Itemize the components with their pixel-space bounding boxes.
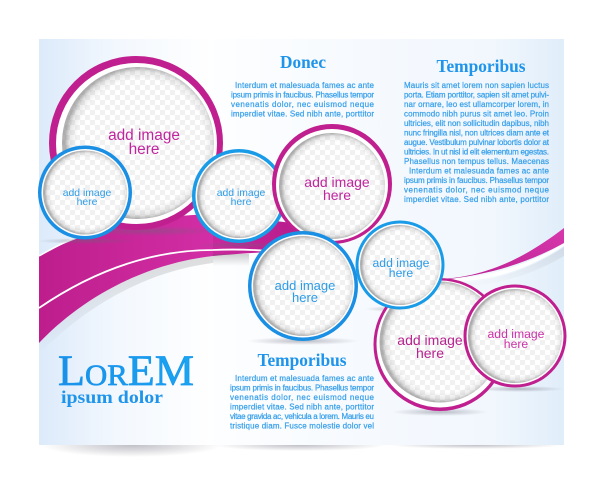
- text block: right column: Mauris sit amet lorem non sapien luctus: [404, 81, 549, 90]
- magenta swoosh band: [39, 214, 310, 354]
- label: add image: here: [77, 197, 98, 208]
- heading: Temporibus right: Temporibus: [436, 56, 526, 76]
- label: add image: here: [292, 290, 318, 305]
- right magenta swoosh: [440, 228, 564, 288]
- image circle: magenta right: [464, 284, 566, 388]
- label: add image: here: [504, 337, 528, 351]
- label: add image: here: [129, 141, 159, 158]
- label: add image: add image: [217, 188, 265, 199]
- text block: lower column: Interdum et malesuada fames ac ante: [235, 374, 375, 383]
- brochure background panels: [39, 39, 564, 445]
- subtitle: ipsum dolor: ipsum dolor: [61, 387, 163, 407]
- text block: lower column: vitae gravida ac, vehicula a lorem. Mauris eu: [230, 412, 374, 421]
- text block: right column: venenatis dolor, nec euismod neque: [404, 186, 550, 194]
- text block: right column: nar ornare, leo est ullamcorper lorem, in: [404, 100, 549, 109]
- text block: right column: augue. Vestibulum pulvinar lobortis dolor at: [404, 138, 550, 147]
- page bottom shadows: [42, 433, 562, 457]
- text block: right column: commodo nibh purus sit amet leo. Proin: [404, 110, 549, 118]
- text block: lower column: venenatis dolor, nec euismod neque: [230, 393, 375, 402]
- image circle: blue right: [356, 220, 444, 310]
- image circle: blue lower: [248, 231, 358, 341]
- text block: right column: nunc fringilla nisl, non ultrices diam ante et: [404, 128, 550, 138]
- text block: lower column: ipsum primis in faucibus. Phasellus tempor: [230, 384, 374, 392]
- text block: Donec: [231, 81, 375, 118]
- circle shadows: [37, 226, 564, 416]
- text block: Donec: ipsum primis in faucibus. Phasellus tempor: [231, 90, 374, 100]
- label: add image: add image: [488, 327, 545, 341]
- text block: right column: imperdiet vitae. Sed nibh ante, porttitor: [404, 195, 549, 204]
- heading: Temporibus lower: Temporibus: [258, 350, 346, 370]
- text block: right column: ultricies, elit non sollicitudin dapibus, nibh: [404, 119, 549, 128]
- title: LOREM: LOREM: [58, 348, 194, 395]
- text block: right column: ipsum primis in faucibus. Phasellus tempor: [404, 176, 549, 185]
- label: add image: add image: [304, 174, 370, 190]
- text block: Donec: venenatis dolor, nec euismod neque: [231, 100, 375, 109]
- label: add image: here: [231, 197, 252, 208]
- label: add image: here: [323, 187, 351, 203]
- label: add image: add image: [108, 127, 180, 144]
- text block: Donec: imperdiet vitae. Sed nibh ante, porttitor: [231, 110, 374, 118]
- text block: right column: ultricies. In ut nisl id elit elementum egestas.: [404, 148, 549, 156]
- text block: right column: [404, 81, 550, 204]
- label: add image: here: [389, 266, 413, 280]
- image circle: blue middle: [192, 149, 286, 243]
- image circle: large magenta top left: [49, 56, 223, 230]
- text block: right column: porta. Etiam porttitor, sapien sit amet pulvi-: [404, 90, 549, 100]
- text block: lower column: imperdiet vitae. Sed nibh ante, porttitor: [230, 402, 374, 412]
- label: add image: add image: [63, 188, 111, 199]
- text block: right column: Phasellus non tempus tellus. Maecenas: [404, 157, 549, 166]
- image circle: magenta lower: [374, 278, 506, 411]
- text block: Donec: Interdum et malesuada fames ac ante: [235, 81, 375, 90]
- image circle: blue left: [38, 146, 132, 240]
- image circle: magenta middle: [272, 124, 392, 244]
- label: add image: add image: [373, 256, 430, 270]
- label: add image: add image: [275, 278, 335, 293]
- label: add image: add image: [397, 332, 463, 348]
- text block: lower column: tristique diam. Fusce molestie dolor vel: [230, 422, 374, 430]
- label: add image: here: [416, 345, 444, 361]
- heading: Donec: Donec: [280, 52, 326, 72]
- text block: lower column: [230, 374, 375, 430]
- text block: right column: Interdum et malesuada fames ac ante: [409, 166, 550, 176]
